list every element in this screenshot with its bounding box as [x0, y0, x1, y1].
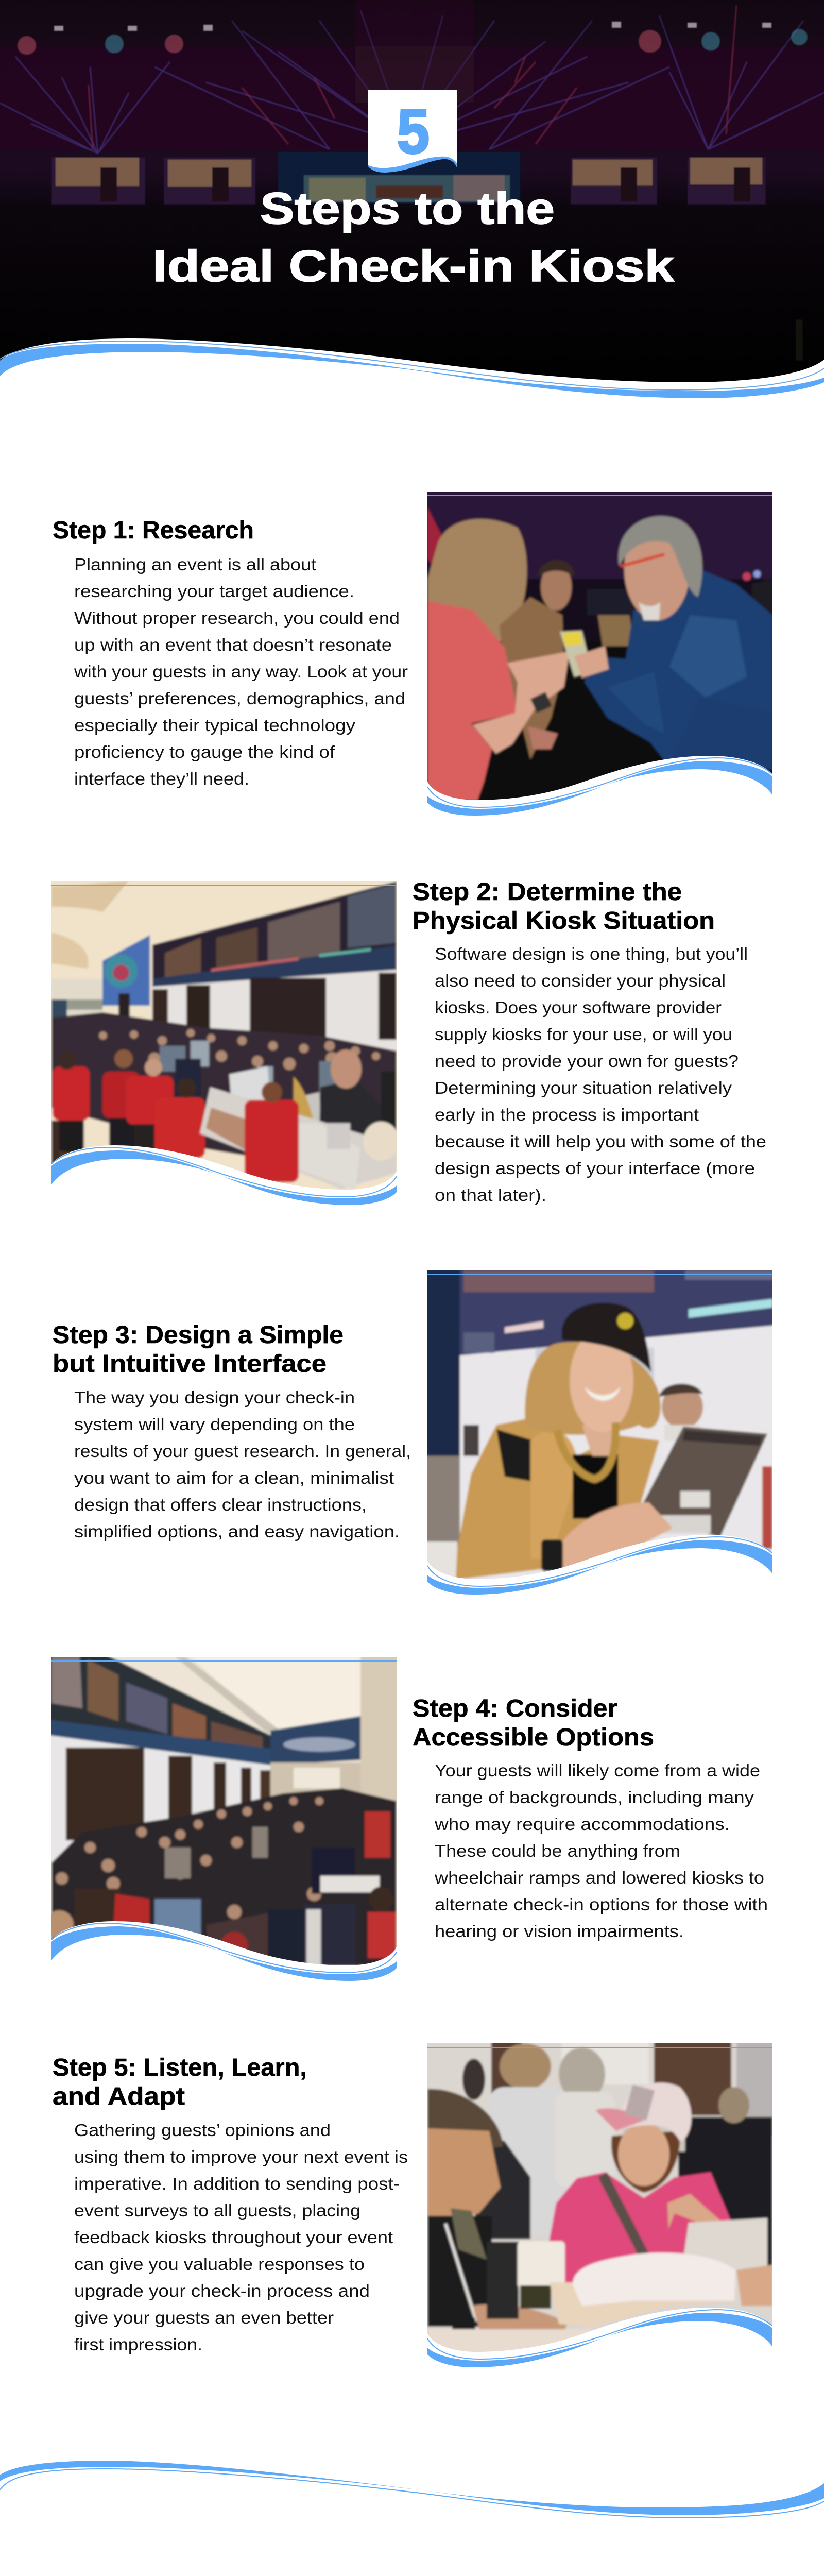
step 1 body text: with your guests in any way. Look at your: [74, 662, 408, 681]
step 5 body text: feedback kiosks throughout your event: [74, 2228, 393, 2247]
number badge: 5: [397, 96, 430, 166]
hero background: stage and lasers: [0, 0, 824, 361]
step 4 body text: who may require accommodations.: [434, 1815, 730, 1834]
panel: step 1: [53, 481, 783, 832]
step 1 photo: two guests looking at a phone: [427, 492, 772, 816]
step 2 heading: Physical Kiosk Situation: [413, 907, 715, 935]
step 2 heading: [413, 878, 715, 935]
step 3 body text: results of your guest research. In general,: [74, 1442, 411, 1461]
step 1 body text: Planning an event is all about: [74, 555, 316, 574]
step 2 photo: staff at registration counter: [52, 881, 397, 1205]
hero wave: blue band: [0, 344, 824, 398]
hero wave: thin line: [0, 341, 824, 390]
footer wave: [0, 2461, 824, 2518]
hero: centre stage: [278, 152, 520, 204]
step 5 body text: imperative. In addition to sending post-: [74, 2174, 400, 2193]
step 5 body text: event surveys to all guests, placing: [74, 2201, 360, 2220]
photo wave overlay: [52, 1921, 397, 1987]
step 2 body text: design aspects of your interface (more: [435, 1159, 755, 1178]
step 2 heading: Step 2: Determine the: [413, 878, 682, 906]
hero: side screens: [52, 157, 766, 205]
step 4 body text: hearing or vision impairments.: [435, 1922, 684, 1941]
step 2 body text: early in the process is important: [435, 1105, 699, 1124]
step 1 body text: up with an event that doesn’t resonate: [74, 635, 392, 654]
title: [152, 184, 674, 291]
step 4 body text: These could be anything from: [435, 1841, 680, 1860]
step 5 photo: guests with tablet and cup: [427, 2043, 772, 2367]
step 4 heading: Accessible Options: [413, 1724, 654, 1751]
number badge: [368, 90, 457, 173]
step 2 body text: Software design is one thing, but you’ll: [435, 944, 748, 963]
step 4 body text: Your guests will likely come from a wide: [435, 1761, 760, 1780]
photo wave overlay: [427, 756, 772, 821]
step 4 body text: range of backgrounds, including many: [435, 1788, 754, 1807]
step 4 photo: crowded lobby: [52, 1657, 397, 1981]
panel: step 5: [53, 2033, 783, 2383]
step 2 body text: Determining your situation relatively: [435, 1078, 732, 1097]
step 4 heading: Step 4: Consider: [413, 1695, 617, 1722]
step 2 body text: kiosks. Does your software provider: [435, 998, 722, 1017]
step 4 body text: alternate check-in options for those with: [435, 1895, 768, 1914]
step 2 body text: also need to consider your physical: [435, 971, 726, 990]
step 4 body text: wheelchair ramps and lowered kiosks to: [434, 1868, 764, 1887]
step 3 body text: The way you design your check-in: [74, 1388, 355, 1407]
title: Ideal Check-in Kiosk: [152, 242, 674, 291]
step 1 body text: [74, 555, 408, 788]
photo wave overlay: [427, 2308, 772, 2373]
step 5 heading: Step 5: Listen, Learn,: [53, 2054, 307, 2081]
step 5 body text: using them to improve your next event is: [74, 2147, 408, 2166]
step 1 body text: Without proper research, you could end: [74, 608, 400, 628]
step 1 body text: interface they’ll need.: [74, 769, 249, 788]
hero wave: white below image edge: [0, 338, 824, 407]
step 4 heading: [413, 1695, 654, 1751]
photo wave overlay: [52, 1145, 397, 1211]
step 5 body text: upgrade your check-in process and: [74, 2281, 370, 2300]
step 2 body text: on that later).: [435, 1185, 546, 1205]
photo wave overlay: [427, 1535, 772, 1600]
panel: step 2: [41, 871, 766, 1221]
panel: hero header: [0, 0, 824, 407]
step 1 heading: Step 1: Research: [53, 517, 254, 544]
title: Steps to the: [260, 184, 555, 233]
step 1 body text: proficiency to gauge the kind of: [74, 742, 335, 761]
step 2 body text: need to provide your own for guests?: [435, 1052, 739, 1071]
step 3 body text: design that offers clear instructions,: [74, 1495, 367, 1514]
step 5 body text: Gathering guests’ opinions and: [74, 2121, 331, 2140]
step 1 body text: guests’ preferences, demographics, and: [74, 689, 405, 708]
step 2 body text: [435, 944, 766, 1205]
step 3 body text: you want to aim for a clean, minimalist: [74, 1468, 394, 1487]
step 2 body text: because it will help you with some of the: [435, 1132, 766, 1151]
step 3 body text: simplified options, and easy navigation.: [74, 1522, 400, 1541]
panel: step 3: [53, 1260, 783, 1611]
step 1 body text: researching your target audience.: [74, 582, 354, 601]
step 5 body text: give your guests an even better: [74, 2308, 334, 2327]
step 5 body text: can give you valuable responses to: [74, 2255, 365, 2274]
step 5 body text: [74, 2121, 408, 2354]
step 5 body text: first impression.: [74, 2335, 202, 2354]
step 5 heading: [53, 2054, 307, 2110]
step 4 body text: [434, 1761, 768, 1941]
step 2 body text: supply kiosks for your use, or will you: [435, 1025, 732, 1044]
panel: step 4: [41, 1647, 768, 1997]
step 3 body text: system will vary depending on the: [74, 1415, 355, 1434]
step 1 body text: especially their typical technology: [74, 716, 356, 735]
step 3 body text: [74, 1388, 411, 1541]
step 5 heading: and Adapt: [53, 2083, 185, 2110]
step 3 heading: but Intuitive Interface: [53, 1350, 327, 1378]
step 3 heading: [53, 1321, 344, 1378]
step 3 photo: smiling woman with tablet: [427, 1270, 772, 1595]
step 3 heading: Step 3: Design a Simple: [53, 1321, 344, 1349]
